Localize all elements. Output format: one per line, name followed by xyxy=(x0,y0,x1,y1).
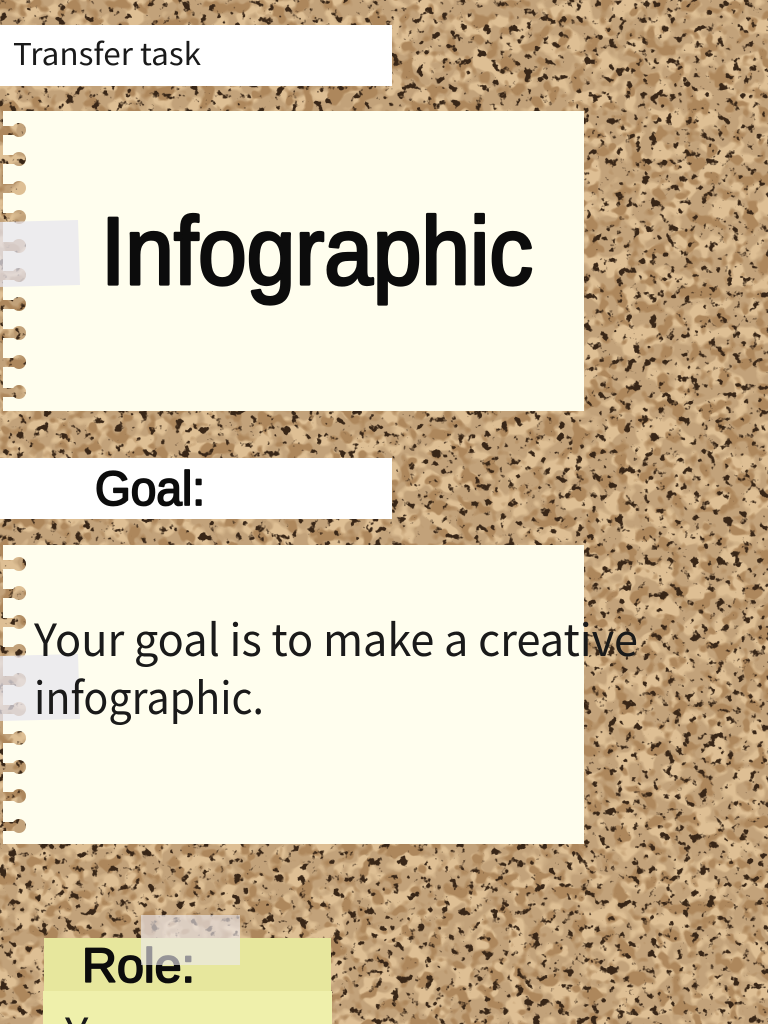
heading bar: Transfer task: Transfer task xyxy=(13,30,201,74)
tape on sticky note xyxy=(141,915,240,965)
heading bar: Transfer task xyxy=(0,25,392,86)
panel: notebook title page xyxy=(3,111,584,411)
heading bar: Goal: Goal: xyxy=(95,463,205,516)
goal text block: Your goal is to make a creative xyxy=(33,605,638,669)
panel: sticky note role xyxy=(43,938,332,1024)
panel: notebook goal page xyxy=(3,545,584,844)
heading: Role: Role: xyxy=(82,940,195,993)
tape on goal page xyxy=(0,654,80,721)
title: Infographic: Infographic xyxy=(101,198,533,305)
tape on title page xyxy=(0,220,80,287)
heading bar: Goal xyxy=(0,458,392,519)
goal text block: infographic. xyxy=(34,663,264,727)
goal text block xyxy=(33,605,638,727)
